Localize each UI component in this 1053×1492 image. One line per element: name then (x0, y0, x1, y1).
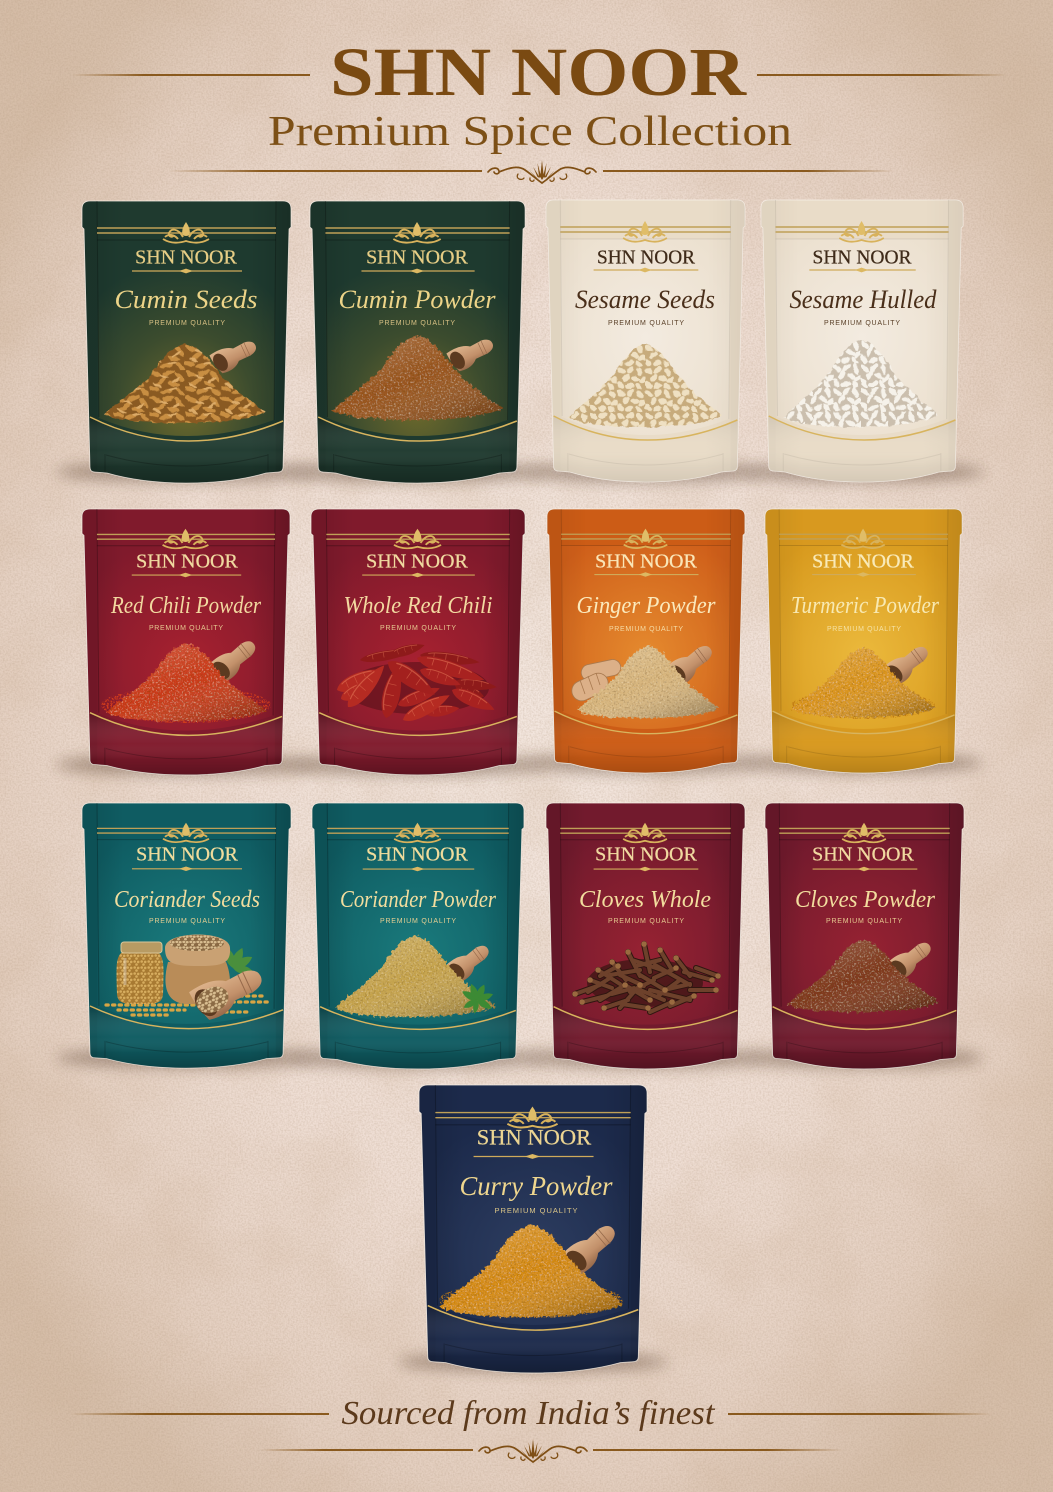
brand label: SHN NOOR (366, 844, 468, 866)
leaves (224, 946, 254, 976)
quality label: PREMIUM QUALITY (827, 626, 901, 633)
pouch: Sesame Seeds (546, 200, 745, 482)
product name: Coriander Seeds (114, 887, 260, 913)
product name: Sesame Seeds (575, 285, 715, 314)
illustration: sesame pile (568, 344, 722, 427)
scoop of seeds (188, 961, 269, 1024)
bag (82, 201, 291, 483)
header block (72, 34, 1007, 183)
illustration: clove powder pile with scoop (787, 936, 939, 1012)
product name: Red Chili Powder (110, 593, 262, 619)
product name: Ginger Powder (576, 593, 716, 619)
quality label: PREMIUM QUALITY (149, 918, 225, 925)
product name: Cloves Whole (579, 887, 711, 913)
brand label: SHN NOOR (366, 246, 468, 268)
brand label: SHN NOOR (595, 550, 697, 572)
product name: Turmeric Powder (791, 593, 940, 619)
pouch: Curry Powder (419, 1085, 647, 1373)
illustration: jar, sack, scoop and seeds (106, 934, 269, 1024)
illustration: turmeric pile with scoop (791, 640, 935, 719)
brand label: SHN NOOR (595, 844, 697, 866)
quality label: PREMIUM QUALITY (608, 918, 684, 925)
bag (419, 1085, 647, 1373)
bag (546, 803, 745, 1069)
illustration: cumin pile with scoop (104, 335, 266, 423)
quality label: PREMIUM QUALITY (149, 320, 225, 327)
bag (765, 803, 964, 1069)
bag (765, 509, 962, 773)
quality label: PREMIUM QUALITY (379, 320, 455, 327)
quality label: PREMIUM QUALITY (824, 320, 900, 327)
pouch: Red Chili Powder (82, 509, 290, 775)
footer tagline: Sourced from India’s finest (342, 1395, 716, 1432)
jar (117, 942, 163, 1004)
brand label: SHN NOOR (812, 844, 914, 866)
product name: Cloves Powder (795, 887, 936, 913)
pouch: Ginger Powder (547, 509, 745, 773)
main title: SHN NOOR (330, 34, 747, 110)
quality label: PREMIUM QUALITY (494, 1206, 578, 1215)
scattered seeds (106, 996, 268, 1015)
product name: Cumin Seeds (114, 285, 258, 314)
bag (310, 201, 525, 483)
illustration: coriander powder pile, scoop, leaves (335, 936, 495, 1017)
quality label: PREMIUM QUALITY (608, 320, 684, 327)
quality label: PREMIUM QUALITY (149, 625, 223, 632)
brand label: SHN NOOR (812, 550, 914, 572)
brand label: SHN NOOR (136, 550, 238, 572)
illustration: red chili powder pile with scoop (101, 634, 271, 723)
footer block (70, 1395, 992, 1462)
bag (311, 509, 525, 775)
illustration: ginger powder pile, root and scoop (569, 639, 719, 718)
pouch: Cloves Powder (765, 803, 964, 1069)
pouch: Sesame Hulled (761, 200, 963, 482)
bag (761, 200, 963, 482)
brand label: SHN NOOR (136, 844, 238, 866)
quality label: PREMIUM QUALITY (380, 918, 456, 925)
pouch: Coriander Powder (312, 803, 524, 1069)
quality label: PREMIUM QUALITY (609, 626, 683, 633)
product name: Sesame Hulled (790, 285, 937, 314)
pouch: Whole Red Chili (311, 509, 525, 775)
pouch: Cloves Whole (546, 803, 745, 1069)
brand label: SHN NOOR (812, 246, 912, 268)
brand label: SHN NOOR (477, 1124, 591, 1150)
subtitle: Premium Spice Collection (268, 109, 792, 155)
illustration: curry powder pile with scoop (439, 1218, 623, 1318)
product name: Curry Powder (460, 1171, 613, 1201)
bag (312, 803, 524, 1069)
product name: Coriander Powder (340, 887, 497, 913)
pouch: Cumin Powder (310, 201, 525, 483)
illustration: hulled sesame pile (784, 340, 938, 427)
bag (82, 509, 290, 775)
ginger root (569, 658, 622, 704)
bag (546, 200, 745, 482)
illustration: whole cloves (575, 944, 718, 1012)
product name: Whole Red Chili (344, 593, 492, 619)
pouch: Cumin Seeds (82, 201, 291, 483)
bag (82, 803, 291, 1068)
header ornament (488, 160, 596, 183)
brand label: SHN NOOR (135, 246, 237, 268)
quality label: PREMIUM QUALITY (380, 625, 456, 632)
product name: Cumin Powder (338, 285, 496, 314)
brand label: SHN NOOR (597, 246, 696, 268)
footer ornament (479, 1439, 587, 1462)
quality label: PREMIUM QUALITY (826, 918, 902, 925)
pouch: Turmeric Powder (765, 509, 962, 773)
sack (165, 934, 230, 1004)
bag (547, 509, 745, 773)
pouch: Coriander Seeds (82, 803, 291, 1068)
parsley leaves (461, 983, 494, 1014)
illustration: cumin powder pile with scoop (332, 333, 502, 420)
illustration: whole red chilies (334, 640, 497, 726)
brand label: SHN NOOR (366, 550, 468, 572)
